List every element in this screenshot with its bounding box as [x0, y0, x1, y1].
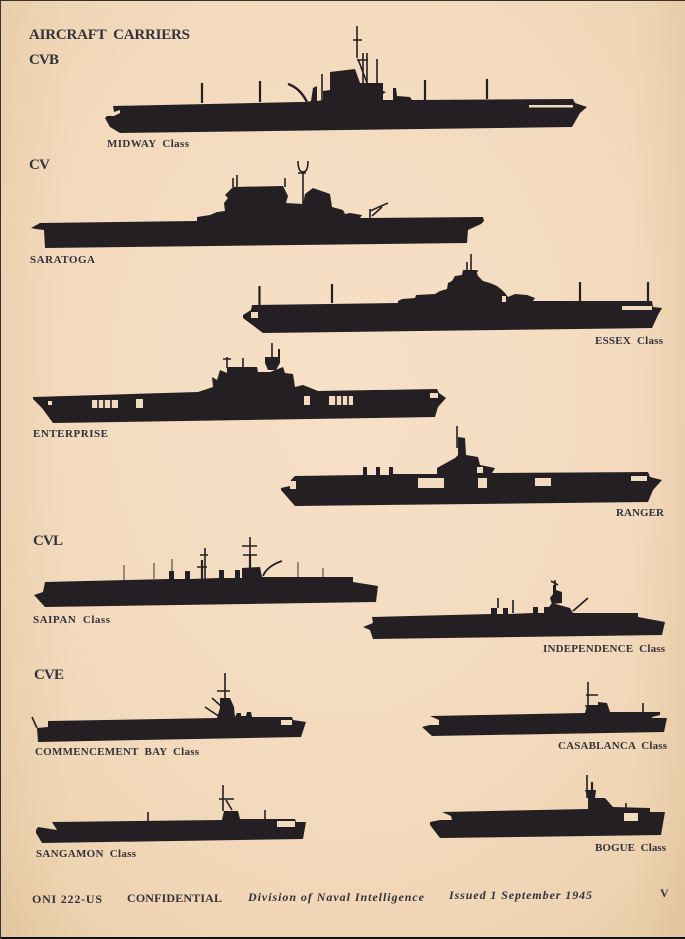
- hull and island: [36, 811, 306, 843]
- ship: Midway class: [105, 26, 587, 133]
- stern opening: [281, 720, 292, 725]
- masts: [223, 343, 272, 370]
- hull and island: [281, 437, 662, 506]
- label: Bogue class: BOGUE Class: [595, 842, 667, 854]
- hull and island: [243, 270, 662, 333]
- footer: classification: CONFIDENTIAL: [127, 891, 222, 905]
- ship: Ranger: [281, 426, 662, 506]
- flight deck poles: [202, 79, 487, 103]
- footer: publication code: ONI 222-US: [32, 892, 102, 906]
- hull and island: [105, 69, 587, 133]
- mast and poles: [464, 254, 478, 271]
- footer: issue date: Issued 1 September 1945: [448, 888, 592, 902]
- label: Independence class: INDEPENDENCE Class: [543, 643, 666, 655]
- ship: Independence class: [363, 580, 665, 639]
- ship: Sangamon class: [36, 785, 306, 843]
- label: Essex class: ESSEX Class: [595, 335, 664, 347]
- gallery openings: [529, 105, 573, 108]
- hull, funnels and island: [363, 603, 665, 639]
- hangar openings: [48, 393, 438, 408]
- heading: CVB: CVB: [29, 52, 59, 68]
- label: Casablanca class: CASABLANCA Class: [558, 740, 668, 752]
- hull and island with stack: [31, 186, 484, 248]
- mast and booms: [32, 673, 230, 728]
- hull and island: [422, 702, 667, 736]
- label: Saratoga: SARATOGA: [30, 254, 95, 266]
- mast and poles: [148, 785, 265, 822]
- hull openings: [290, 467, 647, 489]
- footer: page number: V: [660, 886, 669, 900]
- gallery openings: [277, 821, 295, 827]
- hull and island: [430, 798, 665, 838]
- ship: Commencement Bay class: [32, 673, 306, 742]
- title: AIRCRAFT CARRIERS: [29, 27, 190, 43]
- label: Enterprise: ENTERPRISE: [33, 428, 108, 440]
- heading: CVE: CVE: [34, 667, 64, 683]
- mast: [456, 426, 458, 448]
- ship: Essex class: [243, 254, 662, 333]
- label: Saipan class: SAIPAN Class: [33, 614, 111, 626]
- masts: [587, 775, 626, 808]
- label: Sangamon class: SANGAMON Class: [36, 848, 137, 860]
- label: Midway class: MIDWAY Class: [107, 138, 190, 150]
- poles: [498, 598, 513, 613]
- label: Commencement Bay class: COMMENCEMENT BAY Class: [35, 746, 200, 758]
- crane: [263, 561, 282, 576]
- window openings: [624, 813, 638, 821]
- hull, funnels and island: [34, 567, 378, 607]
- heading: CV: CV: [29, 157, 50, 173]
- island gap: [502, 296, 506, 302]
- stern opening: [251, 312, 258, 318]
- crane: [288, 84, 307, 102]
- ship: Bogue class: [430, 775, 665, 838]
- hull and island: [37, 698, 306, 742]
- mast cluster: [550, 585, 562, 604]
- ship: Casablanca class: [422, 682, 667, 736]
- gallery openings: [622, 306, 652, 310]
- tripod mast: [233, 161, 308, 205]
- crane: [573, 598, 588, 611]
- ship: Saipan class: [34, 537, 378, 607]
- ship: Enterprise: [33, 343, 446, 423]
- poles: [124, 559, 323, 580]
- crane: [370, 203, 388, 218]
- hangar opening dividers: [98, 396, 348, 408]
- ship: Saratoga: [31, 161, 484, 248]
- mast: [322, 26, 377, 101]
- hull and island: [33, 367, 446, 423]
- label: Ranger: RANGER: [616, 507, 665, 519]
- mast and pole: [585, 682, 643, 712]
- footer: issuing division: Division of Naval Intelligence: [247, 890, 425, 904]
- heading: CVL: CVL: [33, 533, 63, 549]
- masts: [197, 537, 257, 579]
